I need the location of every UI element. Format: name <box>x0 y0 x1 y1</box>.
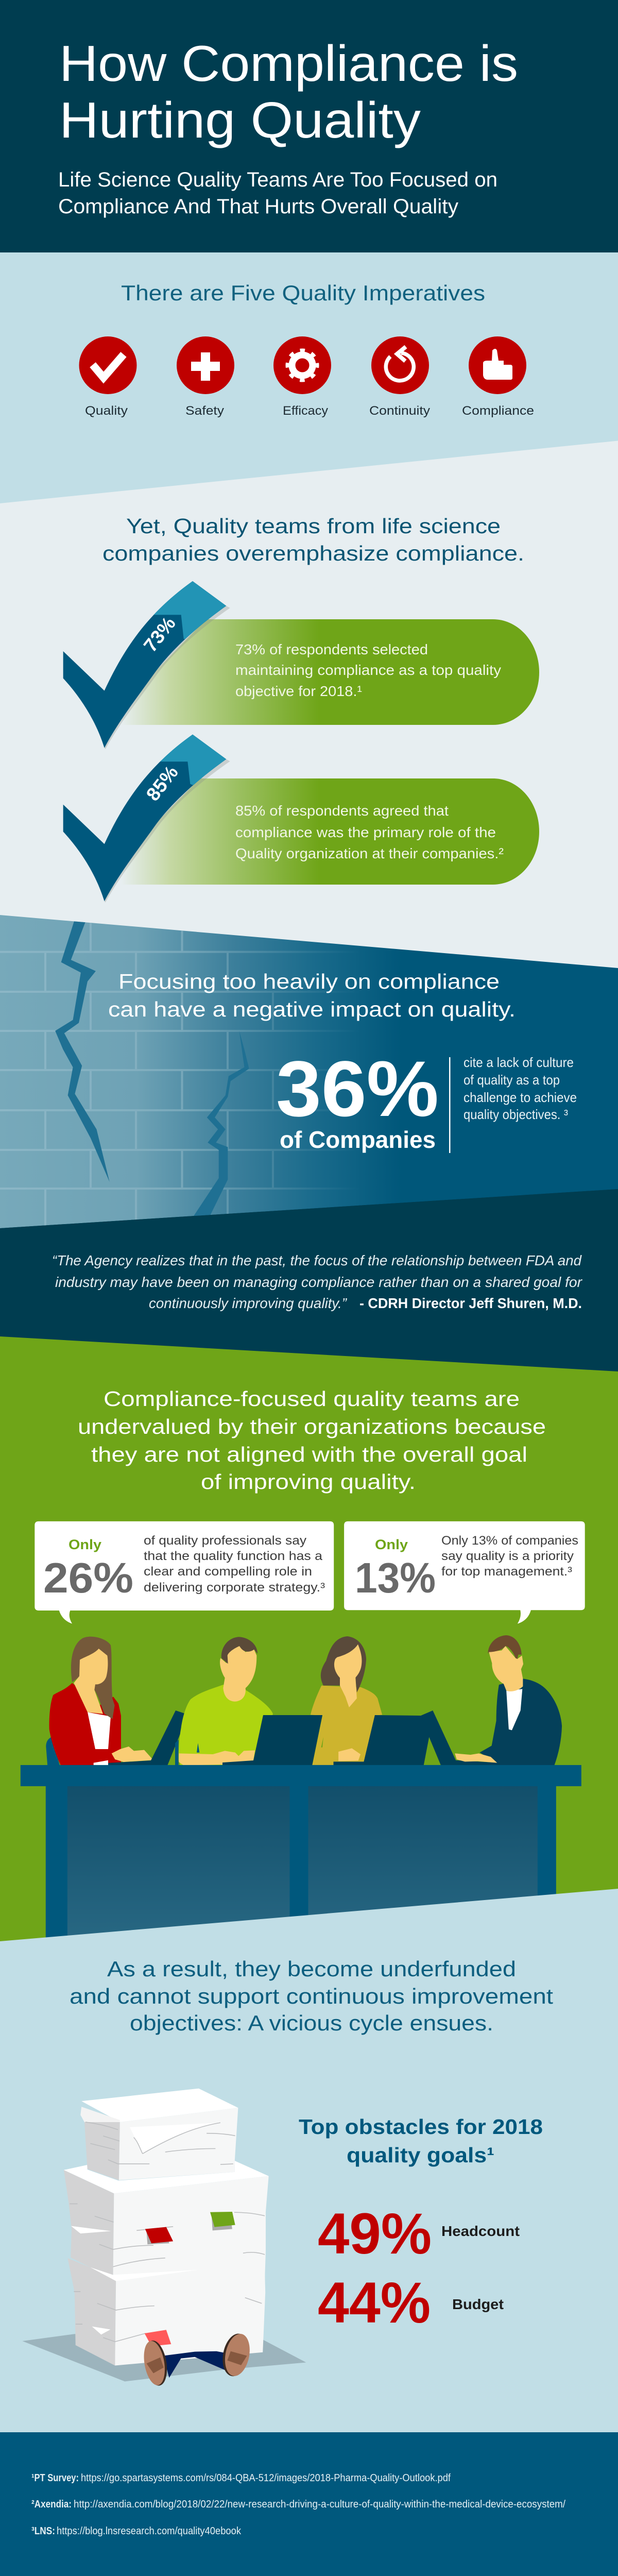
stat: 36% of companies: 36% <box>276 1045 439 1133</box>
pill: 73% stat: maintaining compliance as a top quality <box>235 662 501 678</box>
laptop: first <box>108 1710 188 1766</box>
speech bubble: 13%: 13% <box>355 1554 436 1602</box>
laptop: second <box>222 1715 322 1766</box>
panel: underfunded vicious cycle <box>0 1889 618 2432</box>
stat description: quality objectives. ³ <box>464 1107 568 1122</box>
stat: budget 44% <box>318 2270 504 2335</box>
speech bubble: 26%: of quality professionals say <box>144 1534 306 1548</box>
source: LNS: ³LNS: <box>31 2526 55 2537</box>
title <box>59 35 518 148</box>
heading: top obstacles: quality goals¹ <box>347 2143 494 2167</box>
heading: overemphasize: Yet, Quality teams from life science <box>126 514 501 538</box>
pill: 73% stat: objective for 2018.¹ <box>235 683 362 699</box>
quote text: continuously improving quality.” <box>149 1295 348 1311</box>
pill: 73% stat <box>118 619 539 725</box>
quote text: “The Agency realizes that in the past, the focus of the relationship between FDA and <box>52 1252 582 1268</box>
pill: 85% stat <box>115 778 539 885</box>
heading: underfunded: and cannot support continuous improvement <box>70 1984 553 2008</box>
source: LNS: https://blog.lnsresearch.com/quality40ebook <box>57 2526 242 2537</box>
pill: 85% stat: compliance was the primary role of the <box>235 824 496 840</box>
icon labels: Safety <box>185 404 224 418</box>
heading: undervalued <box>78 1387 546 1494</box>
speech bubble: 13% <box>344 1521 585 1624</box>
icon labels: Quality <box>85 404 128 418</box>
stat: headcount 49% <box>318 2201 520 2266</box>
check mark: 73%: 73% <box>140 613 180 656</box>
heading: top obstacles <box>299 2115 543 2167</box>
stat description: cite a lack of culture <box>464 1055 574 1070</box>
icon labels: Efficacy <box>283 404 328 418</box>
panel: sources <box>0 2432 618 2576</box>
heading: undervalued: they are not aligned with the overall goal <box>91 1443 527 1466</box>
pill: 85% stat: Quality organization at their companies.² <box>235 845 504 861</box>
heading: negative impact: can have a negative impact on quality. <box>108 997 516 1021</box>
pill: 73% stat: 73% of respondents selected <box>235 641 428 657</box>
panel: five quality imperatives <box>0 252 618 520</box>
speech bubble: 26%: that the quality function has a <box>144 1549 323 1563</box>
quote text <box>52 1252 583 1311</box>
subtitle <box>58 168 497 218</box>
panel: negative impact brick wall <box>0 912 618 1231</box>
source: PT Survey: ¹PT Survey: <box>31 2472 79 2484</box>
heading: undervalued: of improving quality. <box>201 1470 416 1494</box>
divider <box>449 1057 450 1153</box>
subtitle: Compliance And That Hurts Overall Quality <box>58 195 458 218</box>
icon labels <box>85 404 534 418</box>
table <box>21 1765 581 1956</box>
speech bubble: 26% <box>35 1521 334 1624</box>
quote text: - CDRH Director Jeff Shuren, M.D. <box>359 1295 582 1311</box>
heading: underfunded <box>70 1957 553 2035</box>
check mark: 73% <box>63 581 230 749</box>
title: How Compliance is <box>59 35 518 92</box>
pill: 85% stat: 85% of respondents agreed that <box>235 803 449 819</box>
heading: imperatives: There are Five Quality Imperatives <box>121 281 485 305</box>
stat: headcount 49%: 49% <box>318 2201 432 2266</box>
panel: header <box>0 0 618 252</box>
title: Hurting Quality <box>59 92 421 148</box>
cracks <box>55 917 249 1218</box>
source: Axendia: http://axendia.com/blog/2018/02/22/new-research-driving-a-culture-of-quality-within-the-medical-device-ecosystem/ <box>74 2499 565 2510</box>
heading: underfunded: objectives: A vicious cycle ensues. <box>130 2011 493 2035</box>
heading: overemphasize: companies overemphasize compliance. <box>102 541 524 565</box>
speech bubble: 13%: Only 13% of companies <box>441 1534 578 1548</box>
stat: headcount 49%: Headcount <box>441 2223 520 2239</box>
speech bubble: 13%: say quality is a priority <box>441 1549 574 1563</box>
quote text: industry may have been on managing compliance rather than on a shared goal for <box>55 1274 583 1290</box>
stat: budget 44%: Budget <box>452 2296 504 2312</box>
panel: overemphasize compliance <box>0 441 618 979</box>
stat description: challenge to achieve <box>464 1090 577 1105</box>
illustration: paper stack with buried person <box>22 2089 306 2387</box>
panel: FDA quote <box>0 1189 618 1391</box>
speech bubble: 26%: delivering corporate strategy.³ <box>144 1581 325 1595</box>
icon: efficacy gear <box>273 336 331 394</box>
check mark: 85%: 85% <box>142 762 182 805</box>
stat: 36% of companies: of Companies <box>280 1126 436 1153</box>
icon: quality check <box>79 336 137 394</box>
person: man in navy jacket <box>479 1635 562 1766</box>
stat: budget 44%: 44% <box>318 2270 431 2335</box>
heading: top obstacles: Top obstacles for 2018 <box>299 2115 543 2139</box>
heading: overemphasize <box>102 514 524 565</box>
heading: undervalued: undervalued by their organizations because <box>78 1415 546 1438</box>
speech bubble: 13%: Only <box>375 1537 408 1552</box>
person: woman in red jacket <box>46 1637 152 1766</box>
heading: underfunded: As a result, they become underfunded <box>107 1957 516 1981</box>
heading: undervalued: Compliance-focused quality teams are <box>104 1387 520 1411</box>
source: Axendia: ²Axendia: <box>31 2499 72 2510</box>
laptop: third <box>333 1710 500 1766</box>
heading: negative impact: Focusing too heavily on compliance <box>118 970 500 993</box>
speech bubble: 26%: clear and compelling role in <box>144 1565 312 1579</box>
check mark: 85% <box>63 735 230 903</box>
icon: compliance thumb <box>469 336 526 394</box>
speech bubble: 26%: 26% <box>43 1554 133 1602</box>
brick wall mortar <box>0 922 335 1225</box>
speech bubble: 13%: for top management.³ <box>441 1565 572 1579</box>
speech bubble: 26%: Only <box>68 1537 101 1552</box>
panel: undervalued teams <box>0 1336 618 1958</box>
person: man in green shirt <box>175 1637 273 1766</box>
icon: continuity arrow <box>371 336 429 394</box>
icon: safety cross <box>177 336 234 394</box>
subtitle: Life Science Quality Teams Are Too Focused on <box>58 168 497 191</box>
source: PT Survey: https://go.spartasystems.com/rs/084-QBA-512/images/2018-Pharma-Quality-Outlook.pdf <box>81 2472 451 2484</box>
stat description <box>464 1055 577 1122</box>
person: woman in mustard shirt <box>311 1636 382 1765</box>
icon labels: Compliance <box>462 404 534 418</box>
stat description: of quality as a top <box>464 1072 560 1088</box>
icon labels: Continuity <box>369 404 430 418</box>
heading: negative impact <box>108 970 516 1021</box>
